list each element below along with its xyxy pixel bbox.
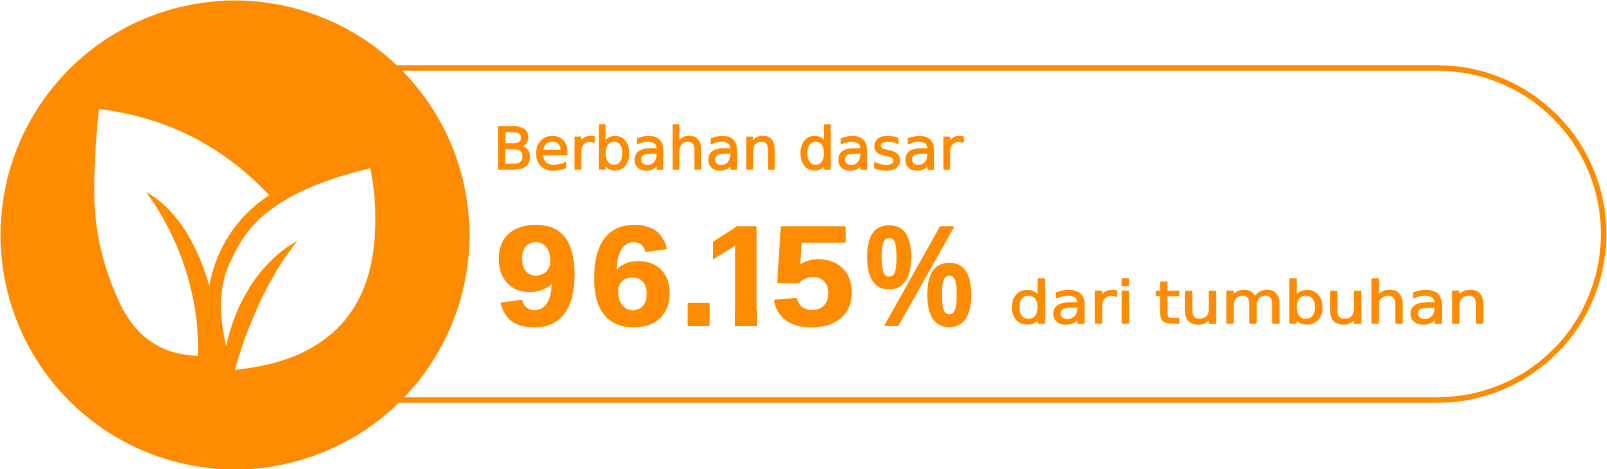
statistic: 96.15%: 1: [703, 197, 782, 356]
statistic: 96.15%: .: [679, 197, 718, 356]
statistic: 96.15%: 6: [590, 198, 674, 356]
heading: Berbahan dasar: Berbahan dasar: [493, 115, 963, 183]
icon: left leaf: [94, 109, 269, 356]
statistic: 96.15%: [498, 224, 972, 328]
icon: orange circle with plant leaves: [0, 0, 470, 469]
statistic: 96.15%: 5: [770, 198, 855, 356]
icon: right leaf: [221, 168, 375, 370]
text: dari tumbuhan: dari tumbuhan: [1009, 269, 1488, 337]
statistic: 96.15%: %: [865, 197, 974, 356]
statistic: 96.15%: 9: [495, 198, 579, 356]
pill outline: [235, 68, 1604, 400]
